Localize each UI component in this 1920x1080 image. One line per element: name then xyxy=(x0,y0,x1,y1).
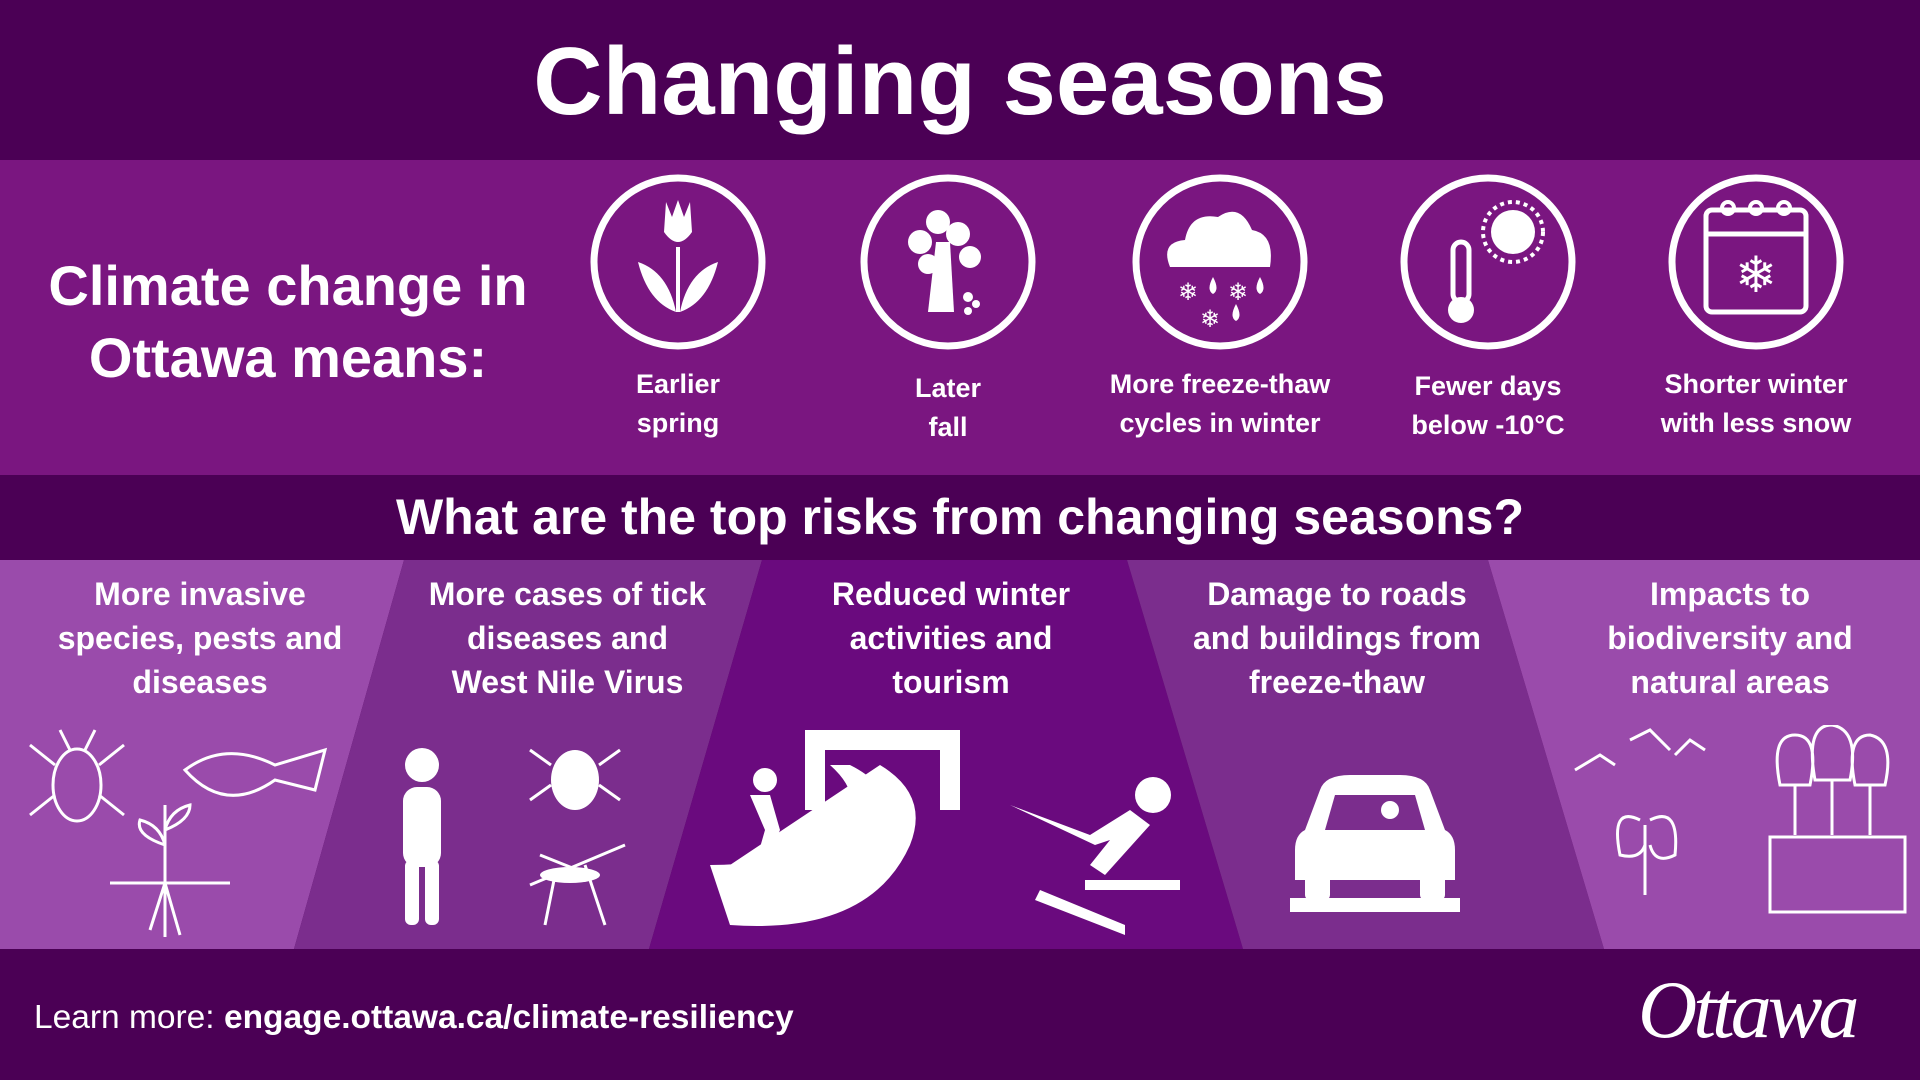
risk title: invasive species xyxy=(58,576,342,700)
heading: climate change in Ottawa xyxy=(48,254,528,389)
label: fewer days: below -10°C xyxy=(1411,410,1565,440)
risk title: biodiversity: natural areas xyxy=(1630,664,1830,700)
risk title: winter activities: tourism xyxy=(892,664,1010,700)
icon: cloud snow rain: ❄ xyxy=(1228,279,1248,306)
risk title: winter activities xyxy=(832,576,1070,700)
label: freeze-thaw: cycles in winter xyxy=(1119,408,1321,438)
risk title: winter activities: activities and xyxy=(850,620,1052,656)
label: fewer days xyxy=(1411,371,1565,440)
risk title: winter activities: Reduced winter xyxy=(832,576,1070,612)
icon group: person tick mosquito xyxy=(403,748,626,926)
label: fewer days: Fewer days xyxy=(1414,371,1562,401)
panel: risks background xyxy=(0,560,1920,949)
risk title: roads: Damage to roads xyxy=(1207,576,1467,612)
risk title: tick diseases: West Nile Virus xyxy=(452,664,683,700)
icon: cloud snow rain: ❄ xyxy=(1200,306,1220,333)
label: shorter winter xyxy=(1660,369,1852,438)
header: top risks xyxy=(0,475,1920,560)
icon: calendar snowflake xyxy=(1668,174,1844,350)
risk title: roads xyxy=(1193,576,1481,700)
risk title: roads: freeze-thaw xyxy=(1249,664,1425,700)
title: Changing seasons xyxy=(533,28,1387,135)
risk title: invasive species: More invasive xyxy=(94,576,306,612)
label: later fall xyxy=(915,373,981,442)
risk title: invasive species: species, pests and xyxy=(58,620,342,656)
icon: tree xyxy=(860,174,1036,350)
icon: thermometer sun xyxy=(1400,174,1576,350)
icon: cloud snow rain: ❄ xyxy=(1178,279,1198,306)
icon: cloud snow rain xyxy=(1132,174,1308,350)
risk title: roads: and buildings from xyxy=(1193,620,1481,656)
title band xyxy=(0,0,1920,160)
heading: climate change in Ottawa: Ottawa means: xyxy=(89,326,487,389)
label: later fall: fall xyxy=(928,412,968,442)
risk title: invasive species: diseases xyxy=(132,664,268,700)
label: earlier spring: spring xyxy=(637,408,719,438)
risk title: tick diseases: More cases of tick xyxy=(429,576,706,612)
footer link text: Learn more: engage.ottawa.ca/climate-resiliency xyxy=(34,999,794,1036)
icon: car xyxy=(1290,775,1460,912)
icon group: birds butterfly ecosystem xyxy=(1574,725,1906,914)
icon group: skater canal skier xyxy=(710,730,1180,935)
label: earlier spring: Earlier xyxy=(636,369,720,399)
header: top risks: What are the top risks from changing seasons? xyxy=(396,489,1524,545)
label: freeze-thaw xyxy=(1110,369,1330,438)
logo: Ottawa: Ottawa xyxy=(1638,964,1855,1055)
risk title: tick diseases xyxy=(429,576,706,700)
label: shorter winter: Shorter winter xyxy=(1664,369,1848,399)
icon: calendar snowflake: ❄ xyxy=(1735,247,1777,303)
risk title: biodiversity: Impacts to xyxy=(1650,576,1810,612)
icon: tulip xyxy=(590,174,766,350)
risk title: biodiversity xyxy=(1607,576,1853,700)
icon group: bug fish plant xyxy=(29,729,328,937)
label: freeze-thaw: More freeze-thaw xyxy=(1110,369,1330,399)
panel: climate change means xyxy=(0,160,1920,475)
risk title: biodiversity: biodiversity and xyxy=(1607,620,1853,656)
label: later fall: Later xyxy=(915,373,981,403)
label: shorter winter: with less snow xyxy=(1661,408,1851,438)
heading: climate change in Ottawa: Climate change in xyxy=(48,254,528,317)
label: earlier spring xyxy=(636,369,720,438)
risk title: tick diseases: diseases and xyxy=(467,620,668,656)
